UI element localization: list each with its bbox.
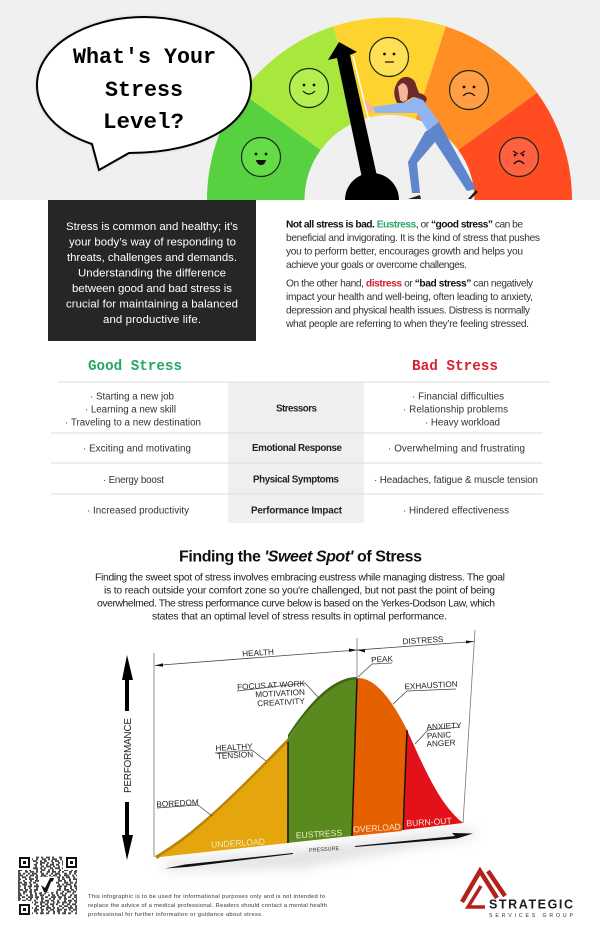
speech bubble title — [37, 17, 251, 170]
row: stressors — [65, 392, 508, 428]
curve: underload — [155, 738, 288, 859]
curve: eustress — [287, 677, 357, 843]
callout: exhaustion: EXHAUSTION — [404, 680, 458, 691]
row: physical symptoms: · Energy boost — [103, 475, 164, 486]
row: stressors: · Learning a new skill — [85, 404, 176, 416]
panel: stress intro: between good and bad stress is — [72, 283, 232, 295]
curve: overload — [352, 678, 407, 836]
icon: very happy face — [242, 138, 280, 176]
axis: pressure: PRESSURE — [309, 846, 340, 854]
text block: distress: impact your health and well-being, often leading to anxiety, — [286, 292, 533, 303]
speech bubble title: What's Your — [73, 45, 216, 70]
logo: strategic services group: SERVICES GROUP — [489, 913, 574, 919]
row: performance impact: Performance Impact — [251, 506, 343, 516]
heading: bad stress: Bad Stress — [412, 358, 498, 375]
icon: happy face — [290, 68, 328, 108]
callout: focus motivation creativity: MOTIVATION — [255, 688, 305, 699]
speech bubble title: Level? — [103, 110, 184, 135]
curve: overload: OVERLOAD — [353, 822, 401, 834]
row: stressors: · Heavy workload — [425, 418, 500, 428]
callout: focus motivation creativity: CREATIVITY — [257, 697, 306, 708]
row: emotional response — [83, 443, 525, 454]
stress gauge — [207, 17, 572, 200]
callout: peak: PEAK — [371, 654, 394, 665]
text block: eustress: achieve your goals or overcome challenges. — [286, 260, 467, 271]
row: stressors: · Traveling to a new destination — [65, 418, 201, 428]
icon: sad face — [450, 70, 488, 110]
axis: performance — [122, 655, 134, 860]
text block: sweet spot: states that an optimal level of stress results in optimal performance. — [152, 612, 447, 622]
dimension label: distress: DISTRESS — [402, 635, 444, 646]
dimension label: health: HEALTH — [242, 648, 274, 658]
row: emotional response: Emotional Response — [252, 443, 343, 454]
chart shadow — [160, 828, 480, 870]
text block: distress: On the other hand, distress or “bad stress” can negatively — [286, 278, 534, 290]
curve: underload: UNDERLOAD — [211, 836, 265, 850]
text block: distress — [285, 278, 534, 330]
disclaimer: replace the advice of a medical professional. Readers should contact a mental health — [88, 903, 327, 909]
axis: performance: PERFORMANCE — [123, 718, 134, 793]
callout: healthy tension: HEALTHY — [215, 742, 253, 753]
panel: stress intro: your body’s way of responding to — [69, 236, 236, 248]
comparison table — [51, 382, 550, 523]
disclaimer: This infographic is to be used for informational purposes only and is not intended to — [88, 894, 325, 900]
row: performance impact: · Hindered effectiveness — [403, 506, 509, 516]
row: stressors: · Financial difficulties — [412, 392, 504, 402]
panel: stress intro: Stress is common and healthy; it’s — [66, 221, 238, 233]
text block: distress: depression and physical health issues. Distress is normally — [286, 306, 531, 316]
panel: stress intro — [48, 200, 256, 341]
callout: boredom — [156, 798, 212, 816]
text block: eustress: Not all stress is bad. Eustress, or “good stress” can be — [286, 220, 523, 230]
curve: burn-out — [403, 730, 463, 830]
callout: anxiety panic anger — [415, 721, 462, 749]
logo: strategic services group: STRATEGIC — [489, 898, 573, 912]
text block: sweet spot: is to reach outside your comfort zone so you're challenged, but not past the point of being — [104, 586, 495, 596]
panel: stress intro: Understanding the difference — [78, 268, 226, 280]
callout: peak — [358, 654, 394, 677]
row: emotional response: · Exciting and motivating — [83, 444, 191, 454]
callout: healthy tension — [215, 742, 266, 761]
callout: exhaustion — [393, 680, 458, 704]
row: physical symptoms: · Headaches, fatigue & muscle tension — [374, 475, 538, 486]
text block: sweet spot — [95, 572, 505, 622]
row: performance impact: · Increased productivity — [87, 506, 189, 516]
heading: sweet spot: Finding the 'Sweet Spot' of Stress — [179, 548, 422, 566]
logo: strategic services group — [462, 871, 574, 919]
callout: focus motivation creativity — [237, 679, 318, 708]
curve: burn-out: BURN-OUT — [406, 816, 453, 828]
heading: good stress: Good Stress — [88, 358, 182, 375]
dimension lines — [154, 630, 475, 857]
callout: healthy tension: TENSION — [217, 750, 254, 761]
callout: anxiety panic anger: ANXIETY — [426, 721, 462, 732]
disclaimer: professional for further information or guidance about stress. — [88, 912, 263, 918]
speech bubble title: Stress — [105, 78, 183, 103]
text block: sweet spot: overwhelmed. The stress performance curve below is based on the Yerkes-Dodson Law, which — [97, 598, 495, 610]
callout: anxiety panic anger: ANGER — [426, 738, 456, 749]
row: emotional response: · Overwhelming and frustrating — [388, 444, 525, 454]
text block: distress: what people are referring to when they’re feeling stressed. — [285, 319, 529, 330]
woman pushing needle — [364, 77, 478, 199]
panel: stress intro: threats, challenges and demands. — [67, 252, 237, 264]
callout: anxiety panic anger: PANIC — [427, 730, 452, 741]
disclaimer — [88, 894, 327, 918]
text block: eustress — [286, 220, 540, 271]
panel: stress intro: and productive life. — [103, 314, 201, 326]
text block: eustress: beneficial and invigorating. It is the kind of stress that pushes — [286, 233, 540, 244]
row: physical symptoms: Physical Symptoms — [253, 474, 340, 486]
callout: focus motivation creativity: FOCUS AT WORK — [237, 679, 306, 692]
stress performance curve — [122, 630, 480, 870]
row: performance impact — [87, 506, 509, 516]
text block: sweet spot: Finding the sweet spot of stress involves embracing eustress while managing distress. The goal — [95, 572, 505, 584]
row: physical symptoms — [103, 474, 538, 486]
text block: eustress: you to perform better, encourages growth and helps you — [286, 246, 523, 258]
icon: neutral face — [370, 38, 408, 76]
row: stressors: · Relationship problems — [403, 404, 508, 416]
row: stressors: · Starting a new job — [90, 392, 175, 402]
axis: pressure — [165, 833, 473, 868]
header band — [0, 0, 600, 200]
gauge needle — [328, 42, 399, 200]
curve: eustress: EUSTRESS — [296, 828, 343, 840]
callout: boredom: BOREDOM — [156, 798, 199, 809]
QR code — [16, 854, 79, 917]
icon: angry face — [500, 138, 538, 176]
row: stressors: Stressors — [276, 404, 318, 414]
panel: stress intro: crucial for maintaining a balanced — [66, 298, 238, 310]
